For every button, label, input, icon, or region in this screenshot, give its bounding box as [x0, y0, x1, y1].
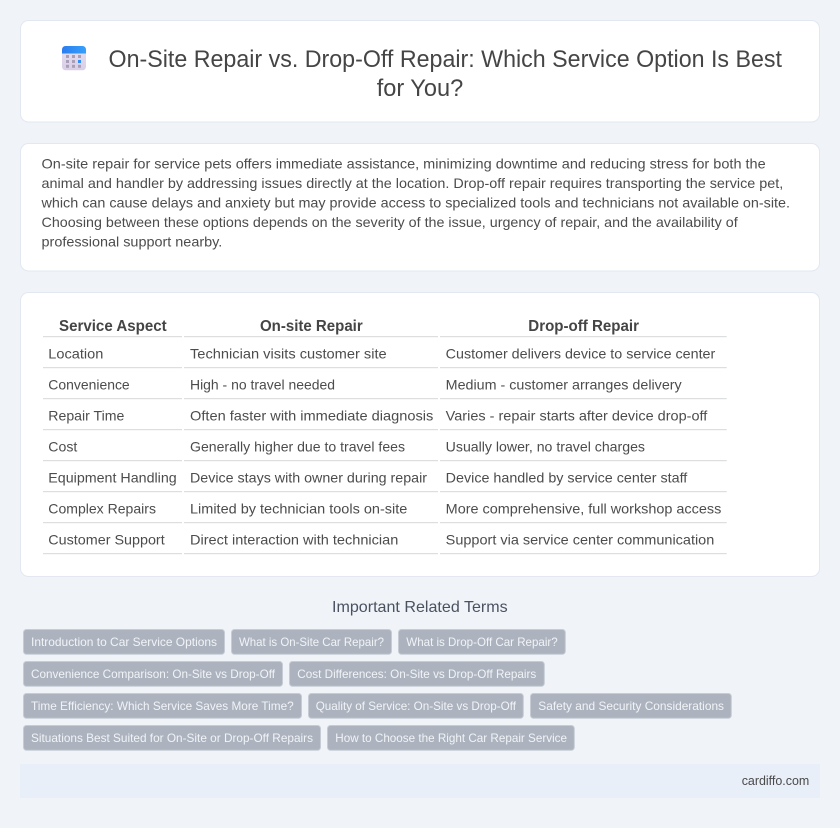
table row: convenience: Convenience — [48, 376, 130, 392]
table row: customer support: Customer Support — [48, 531, 165, 547]
chip — [308, 694, 523, 718]
related terms chips — [24, 630, 731, 750]
heading: important related terms: Important Related Terms — [332, 599, 508, 616]
table row: equipment handling: Equipment Handling — [48, 469, 177, 485]
text block: introduction — [40, 155, 790, 250]
table row: cost — [43, 438, 727, 461]
chip: What is On-Site Car Repair? — [239, 635, 384, 649]
chip — [24, 694, 302, 718]
text block: introduction: professional support nearby. — [42, 234, 222, 250]
table row: complex repairs: Limited by technician tools on-site — [190, 500, 408, 516]
text block: introduction: animal and handler by addressing issues directly at the location. Drop-off repair requires transporting the service pet, — [42, 175, 783, 191]
chip: Safety and Security Considerations — [538, 699, 724, 713]
chip — [24, 726, 320, 750]
table row: complex repairs: More comprehensive, full workshop access — [446, 500, 721, 516]
table row: equipment handling — [43, 469, 727, 492]
text block: introduction: Choosing between these options depends on the severity of the issue, urgency of repair, and the availability of — [42, 214, 738, 230]
table row: location: Technician visits customer site — [190, 345, 387, 361]
table row: convenience: Medium - customer arranges delivery — [446, 376, 682, 392]
table row: complex repairs — [43, 500, 727, 523]
footer — [20, 764, 820, 798]
chip — [328, 726, 574, 750]
table header: Service Aspect — [59, 318, 167, 335]
table row: cost: Generally higher due to travel fees — [190, 438, 405, 454]
table row: repair time: Repair Time — [48, 407, 125, 423]
chip — [24, 630, 224, 654]
chip: Convenience Comparison: On-Site vs Drop-Off — [31, 667, 276, 681]
chip: Quality of Service: On-Site vs Drop-Off — [316, 699, 517, 713]
chip: Introduction to Car Service Options — [31, 635, 217, 649]
table row: location: Location — [48, 345, 103, 361]
chip — [530, 694, 731, 718]
title: for You? — [377, 75, 463, 102]
table row: customer support: Direct interaction with technician — [190, 531, 398, 547]
panel: introduction — [20, 144, 820, 271]
title: On-Site Repair vs. Drop-Off Repair: Which Service Option Is Best — [108, 46, 782, 73]
icon: calendar — [62, 46, 86, 70]
chip — [398, 630, 565, 654]
table row: complex repairs: Complex Repairs — [48, 500, 156, 516]
footer: cardiffo.com — [742, 773, 809, 788]
chip — [290, 662, 544, 686]
table row: customer support — [43, 531, 727, 554]
chip: Cost Differences: On-Site vs Drop-Off Repairs — [297, 667, 536, 681]
table row: equipment handling: Device handled by service center staff — [446, 469, 687, 485]
table row: location: Customer delivers device to service center — [446, 345, 716, 361]
table header — [43, 318, 727, 337]
chip: Situations Best Suited for On-Site or Drop-Off Repairs — [31, 731, 313, 745]
table row: convenience: High - no travel needed — [190, 376, 335, 392]
chip — [232, 630, 392, 654]
table header: Drop-off Repair — [528, 318, 639, 335]
panel: header — [20, 20, 820, 122]
table row: cost: Usually lower, no travel charges — [446, 438, 645, 454]
table row: repair time: Varies - repair starts after device drop-off — [446, 407, 707, 423]
text block: introduction: which can cause delays and anxiety but may provide access to specialized tools and technicians not available on-site. — [40, 194, 790, 210]
table row: repair time: Often faster with immediate diagnosis — [190, 407, 433, 423]
table row: location — [43, 345, 727, 368]
chip: How to Choose the Right Car Repair Service — [335, 731, 567, 745]
table row: customer support: Support via service center communication — [446, 531, 714, 547]
chip: What is Drop-Off Car Repair? — [406, 635, 558, 649]
table header: On-site Repair — [260, 318, 363, 335]
panel: comparison table — [20, 292, 820, 576]
table row: convenience — [43, 376, 727, 399]
chip — [24, 662, 282, 686]
title — [108, 46, 782, 102]
text block: introduction: On-site repair for service pets offers immediate assistance, minimizing downtime and reducing stress for both the — [42, 155, 766, 171]
chip: Time Efficiency: Which Service Saves More Time? — [31, 699, 294, 713]
table row: equipment handling: Device stays with owner during repair — [190, 469, 427, 485]
table row: repair time — [43, 407, 727, 430]
table row: cost: Cost — [48, 438, 77, 454]
